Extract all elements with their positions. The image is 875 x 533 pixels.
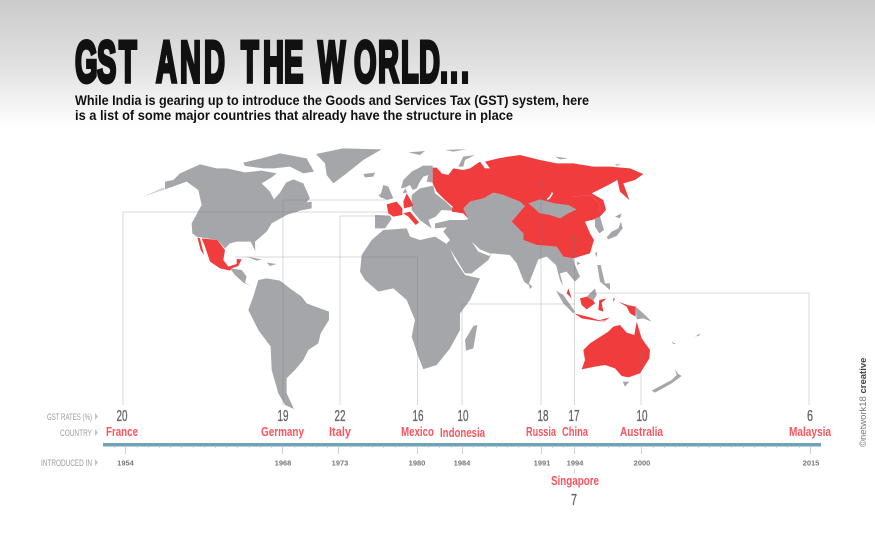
tax rates: 10 (636, 408, 648, 425)
map: France Germany Italy highlighted (387, 193, 419, 225)
tax rates: 20 (116, 408, 128, 425)
world map (143, 148, 700, 409)
country names: China (562, 424, 589, 439)
country names: Singapore (551, 473, 599, 488)
subtitle: is a list of some major countries that already have the structure in place (75, 108, 513, 123)
tax rates: 17 (568, 408, 580, 425)
leader lines (123, 182, 809, 405)
years: 1954 (117, 458, 135, 468)
years: 2000 (634, 458, 650, 468)
tax rates: 16 (412, 408, 424, 425)
country names: Australia (620, 424, 664, 439)
row labels (41, 412, 92, 468)
map: Americas (143, 148, 382, 409)
row labels: COUNTRY (60, 428, 92, 438)
years: 1973 (332, 458, 348, 468)
country names: Indonesia (440, 425, 486, 440)
country names: Russia (526, 424, 557, 439)
country names: Italy (329, 424, 352, 439)
years: 1994 (567, 458, 584, 468)
title: GST AND THE WORLD... (75, 29, 469, 95)
years: 1984 (454, 458, 471, 468)
label arrows (95, 413, 98, 466)
header gradient band (0, 0, 875, 128)
map: East Asia islands (555, 157, 623, 290)
country names: Mexico (401, 424, 434, 439)
row labels: GST RATES (%) (47, 412, 92, 422)
tax rates: 22 (334, 408, 346, 425)
tax rates (116, 408, 813, 509)
subtitle: While India is gearing up to introduce the Goods and Services Tax (GST) system, here (75, 93, 589, 108)
leader line end dots (540, 181, 642, 356)
tax rates: 18 (538, 408, 548, 425)
map: Russia and China highlighted (433, 155, 643, 258)
tax rates: 19 (278, 408, 288, 425)
row labels: INTRODUCED IN (41, 458, 92, 468)
country names (106, 424, 832, 488)
country names: France (106, 424, 138, 439)
tax rates: 6 (807, 408, 813, 425)
years: 2015 (803, 458, 819, 468)
years: 1980 (409, 458, 425, 468)
timeline bar (103, 443, 821, 446)
country names: Malaysia (789, 424, 832, 439)
years: 1968 (275, 458, 291, 468)
map: Mexico highlighted (197, 237, 242, 271)
map: Europe (375, 149, 475, 228)
tax rates: 7 (571, 492, 577, 509)
credit: ©network18 creative (858, 358, 869, 447)
timeline ticks (114, 446, 810, 473)
map: Southeast Asia and Oceania (556, 288, 700, 393)
map: Africa and Asia (360, 193, 580, 369)
tax rates: 10 (458, 408, 469, 425)
years: 1991 (534, 458, 550, 468)
years (117, 458, 819, 468)
country names: Germany (261, 424, 305, 439)
subtitle (75, 93, 589, 123)
